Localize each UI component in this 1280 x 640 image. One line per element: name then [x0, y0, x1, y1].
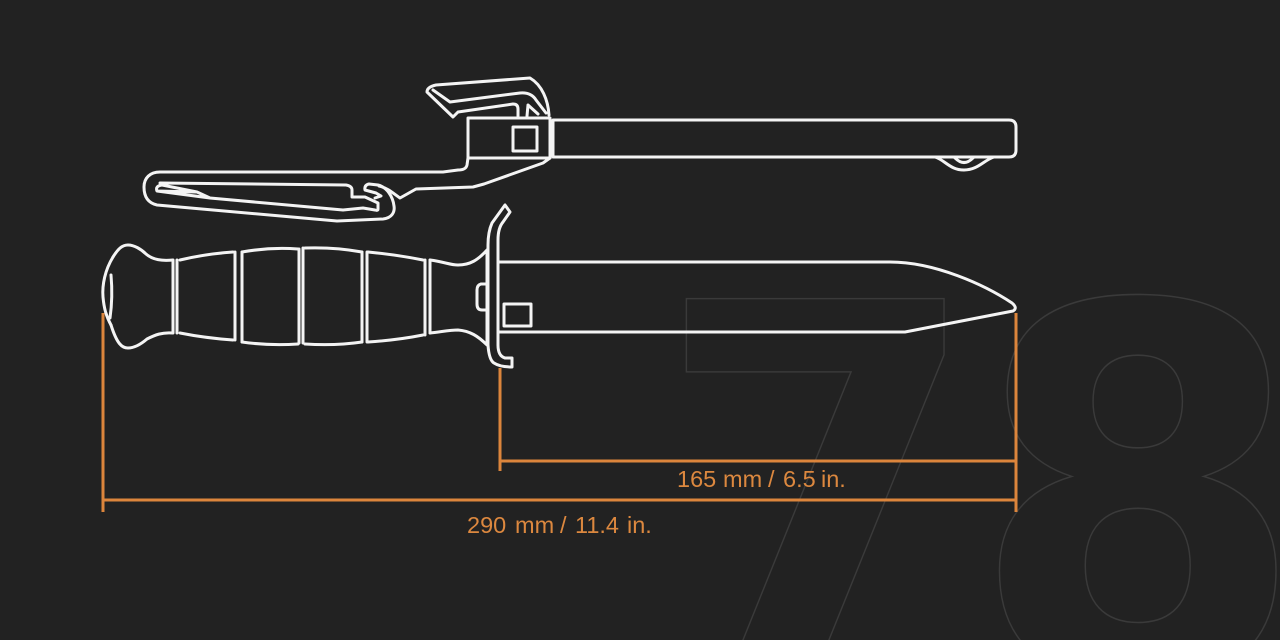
- blade length label: in.: [821, 466, 846, 492]
- dimension lines: [500, 368, 1016, 471]
- overall length label: 11.4: [575, 512, 626, 538]
- ferrule: [430, 250, 487, 345]
- blade length label: 6.5: [783, 466, 822, 492]
- blade ricasso square: [504, 304, 531, 326]
- grip segment 2: [242, 248, 298, 345]
- upper belt loop: [427, 78, 549, 117]
- pommel: [111, 245, 173, 348]
- blade length dimension: [500, 368, 1016, 492]
- background number 78: [655, 194, 1280, 640]
- overall length label: 290: [467, 512, 513, 538]
- sheath body: [553, 120, 1016, 157]
- blade length label: /: [768, 466, 781, 492]
- sheath outline: [144, 78, 1016, 221]
- grip segment 3: [305, 248, 362, 345]
- pommel cap: [103, 257, 113, 325]
- grip segment collars: [177, 248, 430, 343]
- guard: [488, 205, 512, 367]
- overall length label: in.: [627, 512, 652, 538]
- blade length label: mm: [723, 466, 769, 492]
- sheath throat box: [468, 118, 550, 158]
- guard knob: [477, 284, 487, 310]
- belt clip outer: [144, 158, 550, 221]
- knife outline: [103, 205, 1015, 367]
- sheath rivet square: [513, 127, 537, 151]
- overall length dimension: [103, 313, 1016, 538]
- overall length label: mm: [515, 512, 561, 538]
- blade length label: 165: [677, 466, 723, 492]
- grip segment 1: [180, 252, 233, 340]
- grip segment 4: [368, 252, 423, 342]
- blade: [499, 262, 1015, 332]
- dimension lines: [103, 313, 1016, 512]
- sheath tip stud: [935, 157, 994, 170]
- overall length label: /: [560, 512, 573, 538]
- belt clip inner: [157, 183, 378, 210]
